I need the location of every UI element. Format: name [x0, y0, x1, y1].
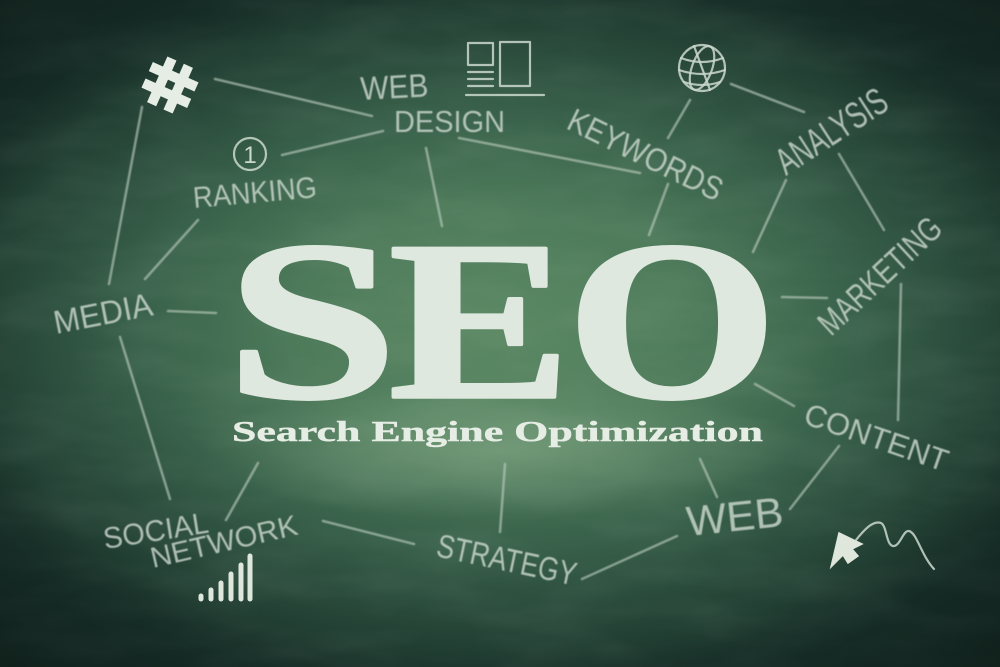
title: SEO: S [226, 195, 398, 446]
icon: globe [679, 43, 725, 93]
subtitle: Search Engine Optimization [232, 417, 764, 448]
label: ranking: RANKING [192, 171, 318, 215]
title: SEO: O [567, 195, 777, 446]
label: social: SOCIAL [101, 507, 211, 556]
label: network: NETWORK [147, 510, 301, 575]
icon: web layout [466, 42, 544, 95]
label: web: WEB [359, 66, 429, 107]
label: design: DESIGN [394, 104, 505, 139]
label: content: CONTENT [800, 397, 953, 478]
icon: cursor arrow with squiggle [831, 522, 934, 569]
label: analysis: ANALYSIS [768, 80, 896, 184]
label: web lower: WEB [684, 488, 785, 545]
label: media: MEDIA [50, 285, 155, 341]
icon: hash [137, 52, 203, 118]
chalk labels [50, 66, 953, 592]
label: keywords: KEYWORDS [562, 101, 729, 208]
title: SEO [226, 195, 777, 447]
connecting chalk lines [109, 79, 901, 579]
icon: ranking number one [234, 138, 266, 170]
icon: ranking number one: 1 [243, 142, 257, 169]
icon: signal bars [201, 556, 250, 599]
label: strategy: STRATEGY [434, 527, 580, 592]
title: SEO: E [389, 196, 571, 447]
label: marketing: MARKETING [811, 209, 950, 343]
